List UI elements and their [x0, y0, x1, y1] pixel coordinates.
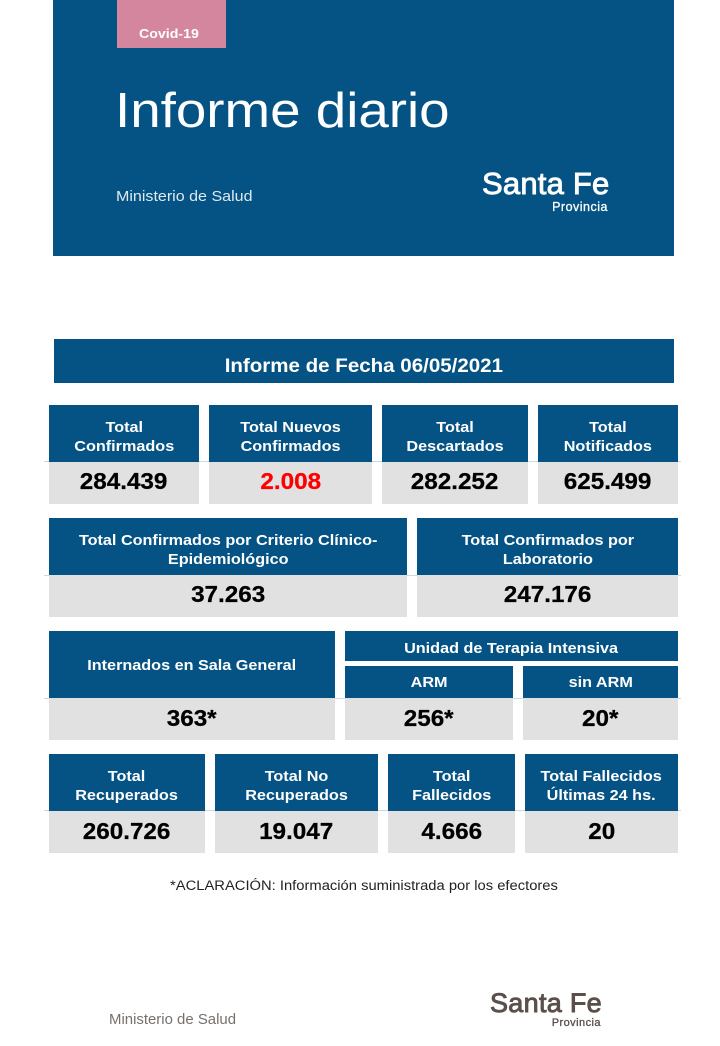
- card: total no recuperados: Total No: [265, 768, 328, 784]
- footer logo: Santa Fe Provincia: Santa Fe: [490, 988, 602, 1018]
- card: total fallecidos: Fallecidos: [412, 787, 491, 804]
- card: total notificados: Total: [589, 418, 627, 436]
- card: total confirmados: [49, 405, 199, 504]
- card: total fallecidos: Total: [433, 768, 470, 784]
- card: total nuevos confirmados: Confirmados: [241, 438, 340, 455]
- card: sala general: [49, 631, 335, 740]
- card: fallecidos 24 hs: 20: [588, 818, 615, 844]
- header banner: [53, 0, 674, 256]
- footer: ministry: Ministerio de Salud: [109, 1012, 236, 1028]
- card: total recuperados: Total: [108, 768, 146, 784]
- card: criterio clinico: 37.263: [191, 581, 265, 607]
- tag: Covid-19: Covid-19: [139, 26, 199, 41]
- card: ARM: 256*: [404, 705, 454, 731]
- card: criterio clinico: [49, 518, 407, 617]
- card: ARM: ARM: [411, 674, 447, 691]
- report date heading: Informe de Fecha 06/05/2021: [225, 356, 503, 377]
- row 2: confirmados por criterio: [49, 518, 678, 617]
- card: laboratorio: Total Confirmados por: [461, 532, 634, 548]
- card: total recuperados: Recuperados: [76, 787, 178, 804]
- footer logo: Santa Fe Provincia: Provincia: [552, 1017, 601, 1029]
- card: fallecidos 24 hs: Total Fallecidos: [541, 768, 662, 784]
- card: total descartados: Total: [436, 418, 474, 436]
- card: sin ARM: 20*: [582, 705, 619, 731]
- card: sala general: 363*: [167, 705, 217, 731]
- logo: Santa Fe Provincia: Provincia: [552, 200, 608, 214]
- subtitle: ministry: Ministerio de Salud: [116, 188, 253, 205]
- card: sin ARM: sin ARM: [568, 674, 633, 691]
- card: total notificados: Notificados: [564, 438, 652, 455]
- card: laboratorio: [417, 518, 678, 617]
- card: total no recuperados: [215, 754, 378, 853]
- card: total nuevos confirmados: [209, 405, 372, 504]
- report date heading: [54, 339, 674, 383]
- heading: unidad de terapia intensiva: Unidad de Terapia Intensiva: [405, 640, 618, 657]
- row 1: totals: [49, 405, 678, 504]
- card: sin ARM: [523, 666, 678, 740]
- card: total notificados: [538, 405, 678, 504]
- card: total confirmados: Total: [105, 418, 143, 436]
- card: total confirmados: 284.439: [80, 468, 168, 494]
- card: laboratorio: 247.176: [504, 581, 591, 607]
- card: ARM: [345, 666, 513, 740]
- card: total no recuperados: Recuperados: [245, 787, 348, 804]
- heading: unidad de terapia intensiva: [345, 631, 678, 661]
- card: total recuperados: [49, 754, 205, 853]
- card: total fallecidos: [388, 754, 515, 853]
- card: total nuevos confirmados: Total Nuevos: [240, 418, 341, 436]
- card: total no recuperados: 19.047: [259, 818, 334, 844]
- card: total descartados: Descartados: [406, 438, 504, 455]
- card: criterio clinico: Total Confirmados por Criterio Clínico-: [79, 532, 377, 548]
- row 4: outcomes: [49, 754, 678, 853]
- tag: Covid-19: [117, 0, 226, 48]
- card: total descartados: 282.252: [411, 468, 499, 494]
- card: sala general: Internados en Sala General: [88, 657, 296, 674]
- card: fallecidos 24 hs: Últimas 24 hs.: [547, 787, 656, 804]
- card: total recuperados: 260.726: [83, 818, 171, 844]
- card: criterio clinico: Epidemiológico: [168, 551, 288, 568]
- card: laboratorio: Laboratorio: [502, 551, 592, 568]
- card: total confirmados: Confirmados: [74, 438, 174, 455]
- card: total descartados: [382, 405, 528, 504]
- row 3: internados: [49, 631, 678, 740]
- card: total notificados: 625.499: [564, 468, 652, 494]
- logo: Santa Fe Provincia: Santa Fe: [482, 166, 609, 201]
- card: fallecidos 24 hs: [525, 754, 678, 853]
- card: total fallecidos: 4.666: [421, 818, 482, 844]
- footnote: *ACLARACIÓN: Información suministrada por los efectores: [170, 878, 558, 893]
- title: Informe diario: [115, 84, 450, 138]
- card: total nuevos confirmados: 2.008: [260, 468, 321, 494]
